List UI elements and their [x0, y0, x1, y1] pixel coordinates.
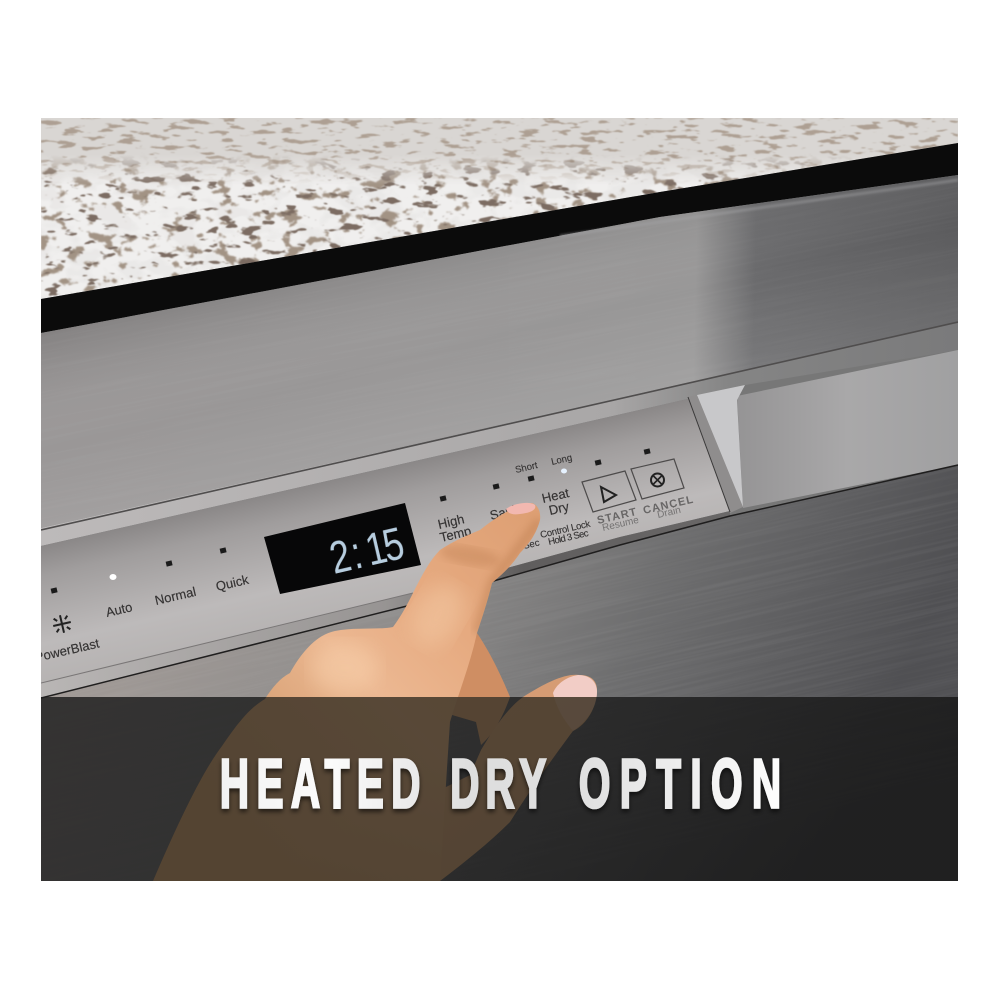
control panel — [33, 385, 958, 698]
control labels: Auto — [104, 599, 134, 620]
control labels: Quick — [214, 572, 251, 594]
handle end cap — [697, 385, 745, 507]
control labels: High — [436, 511, 466, 532]
stainless handle — [737, 350, 958, 508]
upper stainless door panel — [41, 175, 958, 528]
control labels: Short — [514, 460, 539, 476]
shadow gap under countertop — [41, 143, 958, 333]
dark caption band — [41, 697, 958, 881]
title: OPTION — [579, 745, 781, 823]
lit indicators — [110, 468, 567, 580]
palm and index finger — [266, 503, 540, 881]
control labels: Sec — [522, 537, 541, 552]
second finger — [458, 633, 510, 697]
photo: dishwasher control panel — [41, 118, 958, 881]
control labels: Control Lock — [539, 519, 592, 541]
control labels: Dry — [547, 499, 571, 518]
control labels: PowerBlast — [33, 635, 101, 665]
display — [264, 503, 421, 594]
control labels: Normal — [153, 584, 198, 608]
lower stainless door — [48, 466, 958, 697]
icon: PowerBlast spark — [53, 615, 71, 633]
title — [220, 745, 781, 823]
control labels: Sani — [488, 502, 517, 523]
control labels: Long — [550, 452, 573, 468]
control labels: Hold 3 Sec — [547, 528, 590, 548]
indicator dots — [51, 448, 651, 594]
title: DRY — [450, 745, 546, 823]
hand pressing the button — [266, 502, 597, 881]
control labels: Drain — [656, 505, 682, 521]
control labels: CANCEL — [642, 494, 695, 517]
panel right edge strip — [688, 395, 743, 513]
control labels: Heat — [540, 485, 571, 506]
control labels: START — [596, 506, 638, 527]
control labels: Temp — [438, 523, 473, 545]
door edge trim — [41, 345, 866, 546]
thumb — [442, 674, 597, 877]
button: cancel — [631, 459, 684, 499]
title: HEATED — [220, 745, 420, 823]
control labels — [33, 452, 695, 665]
control labels: Resume — [601, 515, 640, 534]
granite countertop — [41, 118, 958, 303]
display time: 2:15 — [325, 517, 409, 584]
button: start — [582, 471, 636, 512]
hand tint through band — [150, 697, 610, 881]
fingernail — [506, 503, 535, 514]
hand shading — [311, 520, 540, 694]
